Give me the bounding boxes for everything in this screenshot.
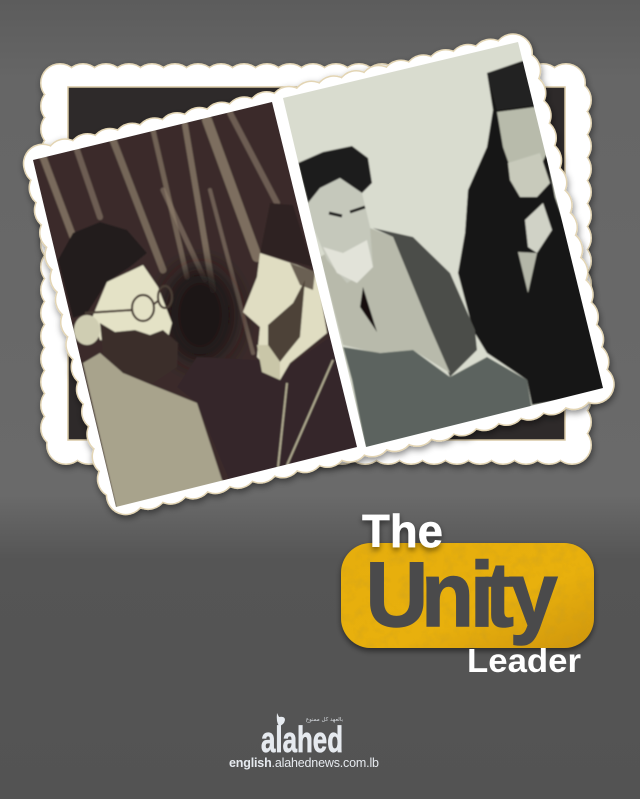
left man glasses xyxy=(85,286,172,321)
seated man robe xyxy=(320,228,450,373)
left man face xyxy=(92,265,172,345)
label background xyxy=(341,543,594,648)
icon: leaf xyxy=(277,713,285,726)
seated man lap xyxy=(343,347,532,455)
logo wordmark: alahed xyxy=(261,719,343,760)
left man turban xyxy=(58,222,147,318)
word: Leader: Leader xyxy=(467,642,581,679)
seated man eyebrows xyxy=(329,207,365,216)
pectoral chains xyxy=(278,360,333,467)
right man hair xyxy=(290,263,315,290)
bishop hand xyxy=(525,203,552,253)
logo: alahed xyxy=(229,713,379,770)
bishop hat xyxy=(487,63,535,110)
curtain folds xyxy=(43,113,277,353)
logo url: english.alahednews.com.lb xyxy=(229,756,379,770)
black collar xyxy=(360,287,377,332)
seated man face xyxy=(308,178,373,283)
seated man beard xyxy=(323,240,373,283)
seated man cape xyxy=(373,228,477,377)
right photo: cleric and bishop seated xyxy=(283,42,603,447)
logo tagline: بالعهد كل ممنوع xyxy=(306,716,343,723)
right man face xyxy=(243,253,327,380)
right man hat xyxy=(260,203,313,267)
back photo xyxy=(68,87,565,440)
title label xyxy=(341,505,594,679)
word: Unity: Unity xyxy=(366,543,558,646)
bishop face xyxy=(496,106,546,164)
bishop robe xyxy=(458,60,610,405)
left man robe xyxy=(82,352,224,507)
right man beard brown xyxy=(268,280,305,362)
word: The: The xyxy=(362,505,443,557)
seated man turban xyxy=(298,146,372,203)
label texture xyxy=(341,548,576,646)
left man ear xyxy=(74,315,100,345)
bishop beard xyxy=(508,153,550,197)
back photo frame xyxy=(60,83,572,445)
right man robe xyxy=(194,357,216,364)
right man beard light xyxy=(257,345,280,380)
dark curtain shadow xyxy=(164,267,236,363)
left photo: two clerics embracing xyxy=(33,102,357,507)
bishop cuff xyxy=(518,252,537,293)
left man beard xyxy=(99,322,178,366)
front photo frame xyxy=(43,52,595,496)
